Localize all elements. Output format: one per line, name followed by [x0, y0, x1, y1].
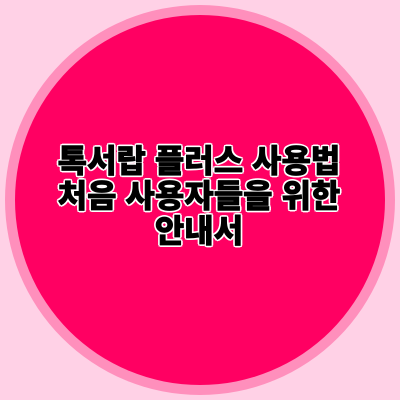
title: 처음 사용자들을 위한 — [58, 178, 340, 214]
title: 톡서랍 플러스 사용법 — [58, 143, 340, 179]
title: 안내서 — [155, 213, 243, 249]
title — [56, 142, 342, 249]
